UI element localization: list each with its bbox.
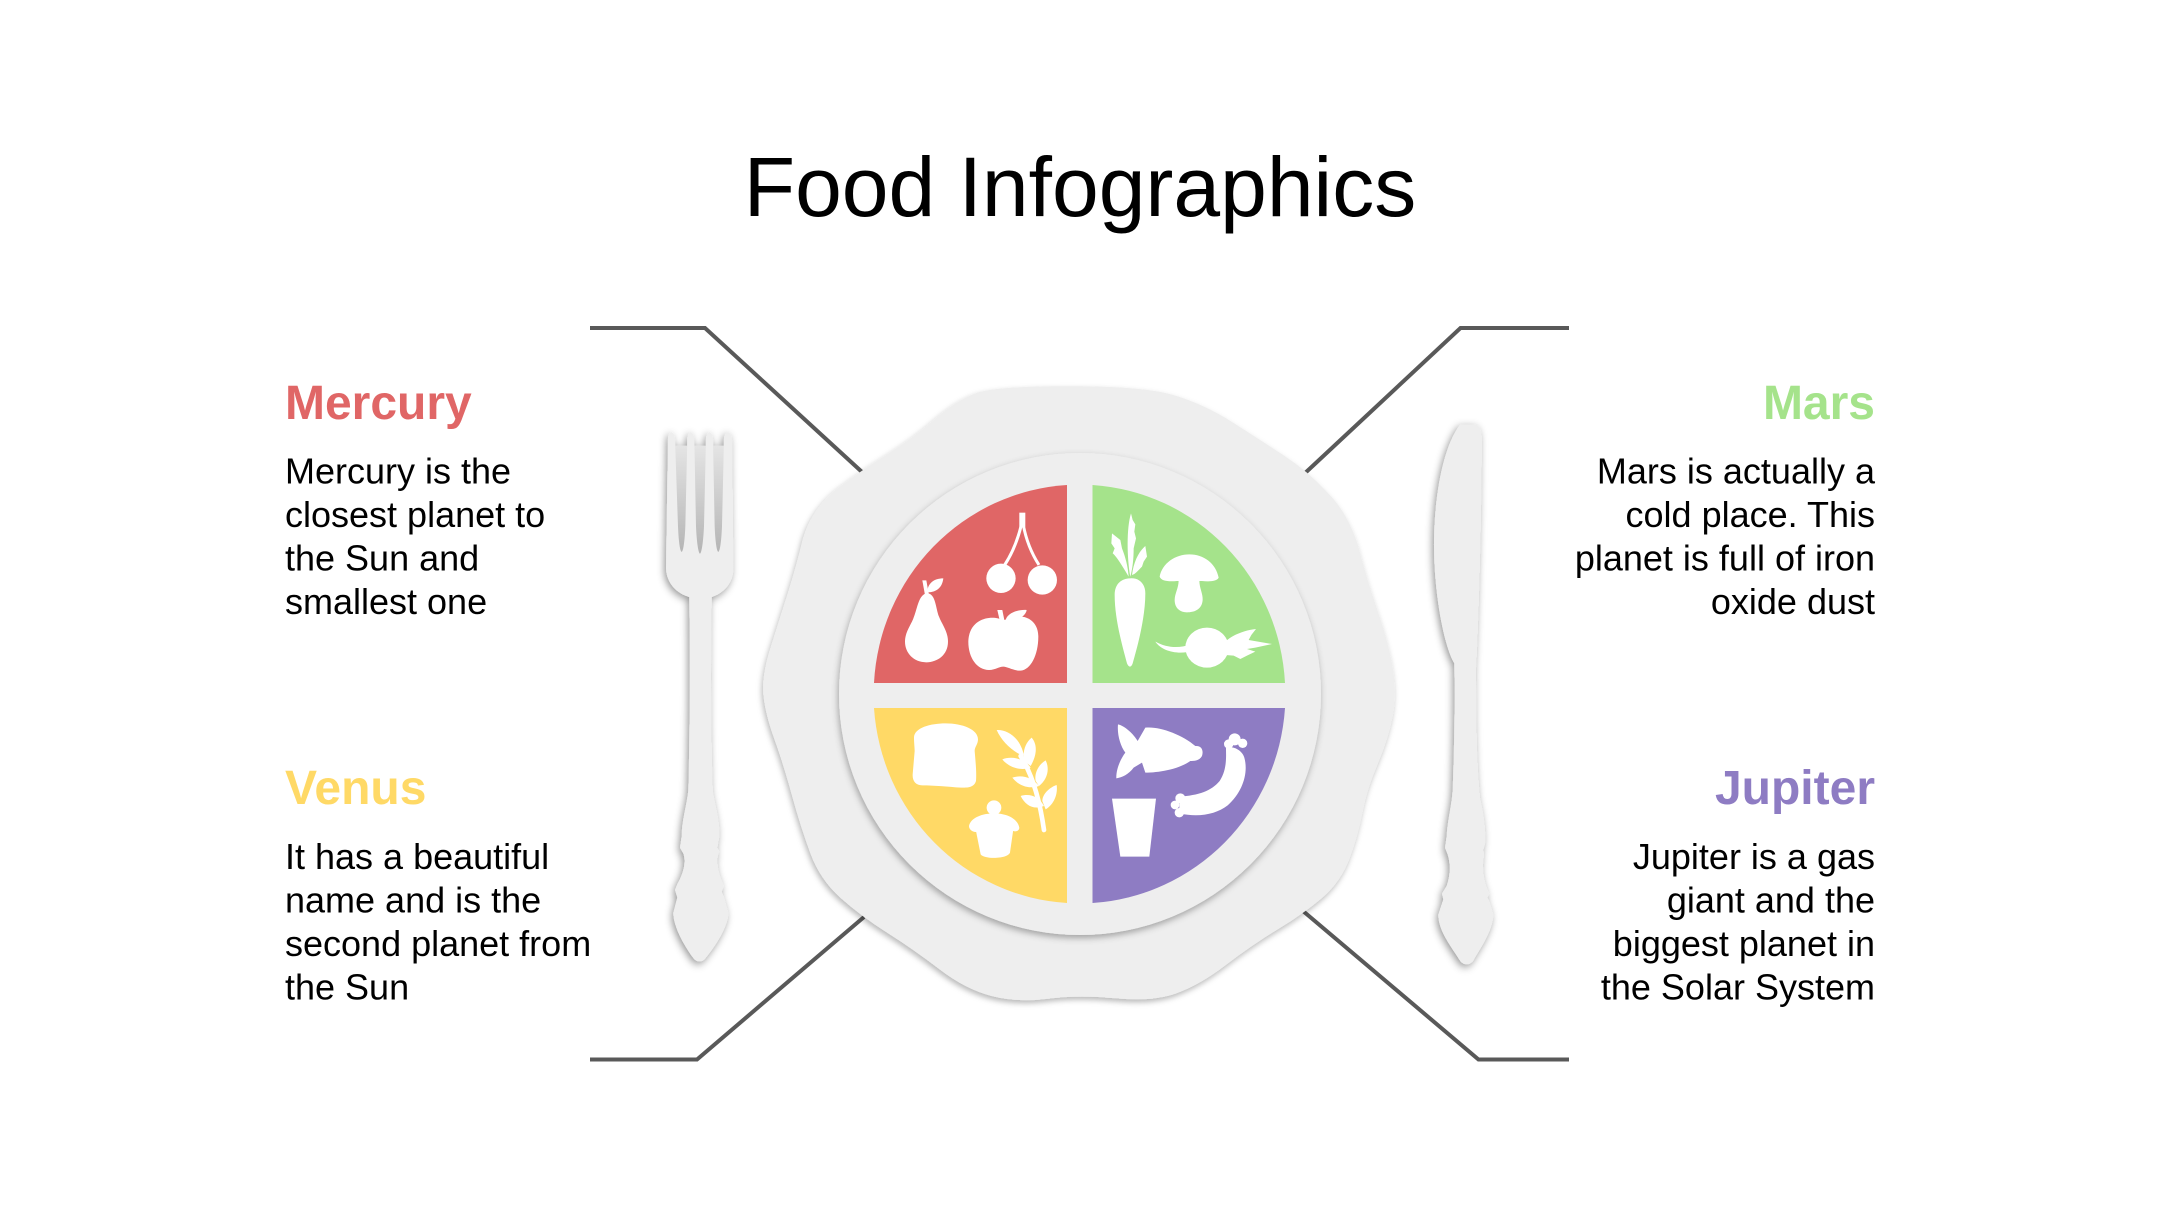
text block: Venus: It has a beautiful [285,836,549,877]
text block: Mercury: Mercury is the [285,451,511,492]
icon: apple [968,610,1038,671]
icon: mushroom [1160,554,1219,612]
quadrant: red fruit [874,485,1067,683]
icon: carrot [1111,513,1147,667]
icon: fish [1116,724,1203,778]
text block: Mars: cold place. This [1626,494,1875,535]
text block: Venus: the Sun [285,966,409,1008]
text block: Jupiter: giant and the [1667,880,1875,920]
text block: Mars [1575,377,1876,622]
grain icons [913,723,1057,858]
vegetable icons [1111,513,1272,668]
text block: Mercury: closest planet to [285,494,545,535]
text block: Mars: Mars [1763,377,1875,430]
text block: Jupiter: biggest planet in [1613,923,1875,964]
connector: Mars [1303,328,1569,475]
fruit icons [905,513,1057,671]
text block: Mercury: the Sun and [285,538,479,578]
text block: Venus: second planet from [285,923,591,964]
quadrant: green vegetables [1092,485,1285,683]
text block: Jupiter [1601,762,1875,1008]
text block: Mars: planet is full of iron [1575,538,1875,578]
text block: Mercury: Mercury [285,377,472,430]
text block: Venus: Venus [285,762,426,815]
plate well [839,453,1321,935]
title: Food Infographics [744,140,1416,234]
text block: Jupiter: Jupiter [1715,762,1875,815]
text block: Jupiter: the Solar System [1601,966,1875,1008]
connector: Venus [590,917,864,1060]
icon: cupcake [969,800,1019,858]
quadrant: purple protein [1092,708,1285,903]
icon: pear [905,578,948,662]
icon: sausage [1171,733,1247,817]
text block: Jupiter: Jupiter is a gas [1633,836,1875,877]
icon: bread [913,723,978,788]
text block: Mercury [285,377,545,622]
icon: radish [1155,628,1272,668]
connector: Jupiter [1303,911,1569,1060]
icon: wheat [997,730,1057,830]
icon: knife [1434,425,1493,964]
icon: cherries [986,513,1057,595]
text block: Mercury: smallest one [285,581,487,622]
icon: fork [666,433,733,962]
protein icons [1112,724,1247,857]
plate rim [763,386,1395,1000]
text block: Mars: Mars is actually a [1597,451,1876,492]
text block: Venus: name and is the [285,880,541,920]
text block: Mars: oxide dust [1711,581,1875,622]
connector: Mercury [590,328,862,472]
quadrant: yellow grains [874,708,1067,903]
plate [763,386,1395,1000]
icon: glass [1112,799,1156,857]
text block: Venus [285,762,591,1008]
